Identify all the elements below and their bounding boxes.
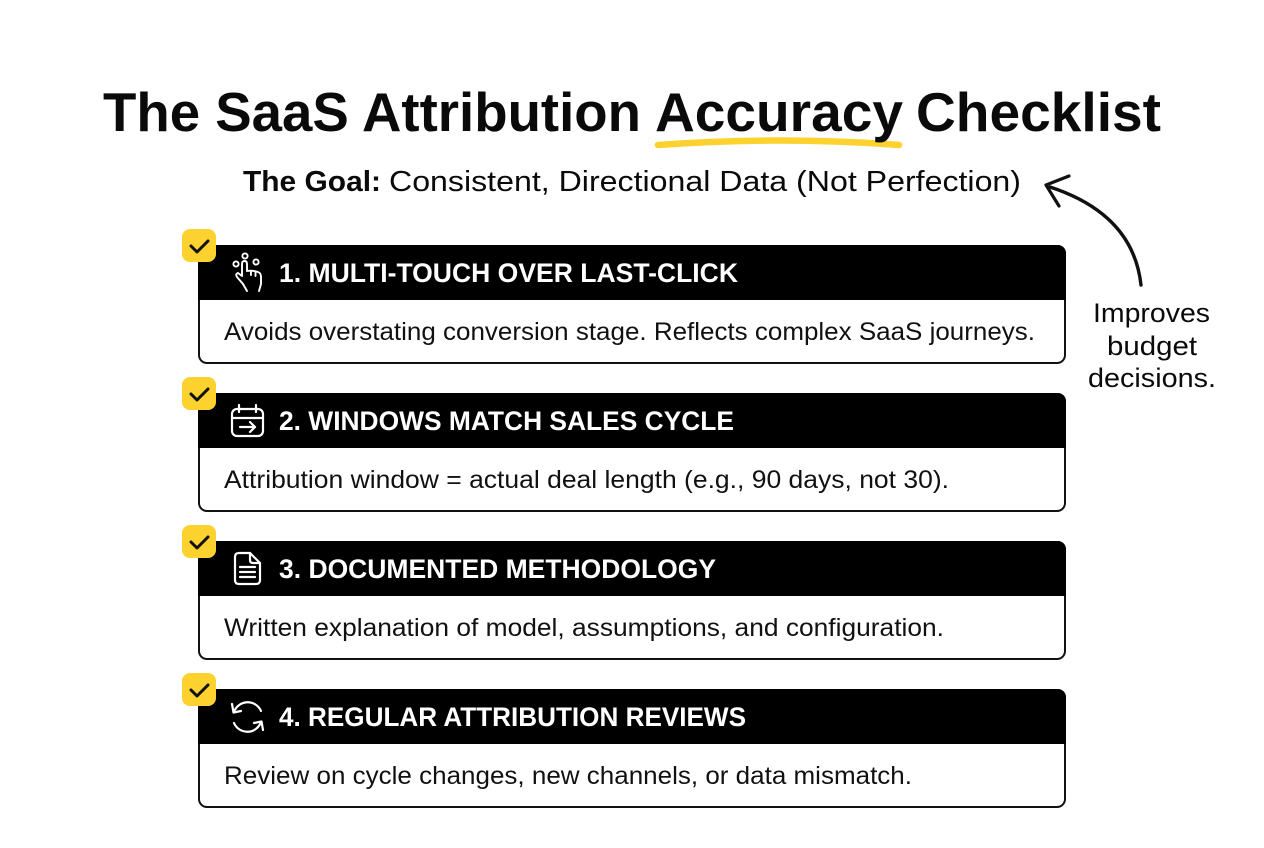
title: The SaaS Attribution [103,81,641,143]
panel: card 2 windows [182,377,1066,511]
card 2 heading: 2. WINDOWS MATCH SALES CYCLE [279,406,734,436]
icon: touch hand [233,253,261,291]
card 4 body text: Review on cycle changes, new channels, or data mismatch. [224,762,912,790]
card 1 header bar [198,245,1066,300]
icon: calendar arrow [232,405,263,436]
callout: improves budget decisions [1088,298,1216,393]
icon: document [235,553,260,584]
card 2 body text: Attribution window = actual deal length (e.g., 90 days, not 30). [224,466,949,494]
card 4 header bar [198,689,1066,744]
checkbox 2 [182,377,216,410]
icon: refresh cycle [232,702,263,732]
title: Accuracy [655,81,903,143]
card 2 header bar [198,393,1066,448]
card 4 heading: 4. REGULAR ATTRIBUTION REVIEWS [279,702,746,732]
arrow: curved hand-drawn [1046,176,1141,285]
card 3 body text: Written explanation of model, assumptions, and configuration. [224,614,944,642]
card 1 heading: 1. MULTI-TOUCH OVER LAST-CLICK [279,258,738,288]
card 3 heading: 3. DOCUMENTED METHODOLOGY [279,554,716,584]
callout: improves budget decisions: Improves [1093,298,1210,328]
title: Checklist [916,81,1161,143]
subtitle: Consistent, Directional Data (Not Perfection) [389,166,1021,198]
yellow underline [658,140,899,145]
checkbox 1 [182,229,216,262]
panel: card 3 methodology [182,525,1066,659]
panel: card 1 multi-touch [182,229,1066,363]
callout: improves budget decisions: budget [1107,331,1198,361]
card 1 body text: Avoids overstating conversion stage. Reflects complex SaaS journeys. [224,318,1035,346]
card 3 header bar [198,541,1066,596]
checkbox 3 [182,525,216,558]
panel: card 4 reviews [182,673,1066,807]
title [103,81,1161,143]
subtitle: The Goal: [243,166,381,198]
callout: improves budget decisions: decisions. [1088,363,1216,393]
checkbox 4 [182,673,216,706]
